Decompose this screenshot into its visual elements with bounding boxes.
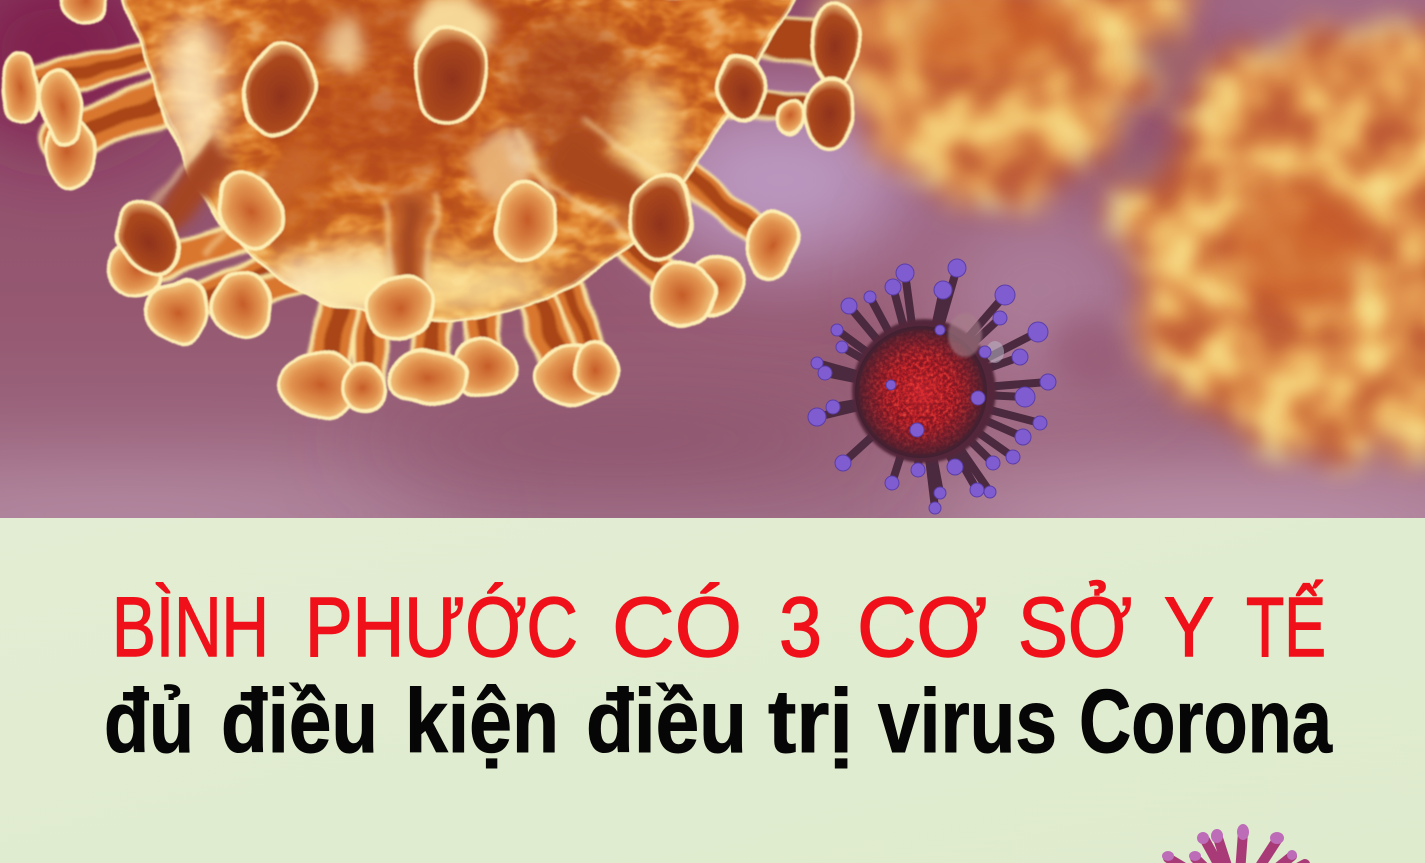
rear spikes	[30, 25, 830, 385]
blurred virus core, right	[900, 0, 1368, 312]
title line 1: BÌNH	[112, 580, 269, 674]
title line 2: Corona	[1079, 672, 1333, 772]
blurred virus, top centre	[840, 0, 1191, 206]
title line 2: điều	[221, 672, 378, 772]
small magenta virus, bottom right	[1162, 824, 1305, 863]
title line 1	[112, 580, 1326, 674]
spikes	[817, 268, 1048, 508]
title line 1: PHƯỚC	[305, 580, 578, 674]
photo panel: virus banner	[0, 0, 1425, 555]
banner background	[0, 0, 1425, 555]
small purple virus	[808, 259, 1056, 514]
title line 1: TẾ	[1246, 580, 1326, 674]
blurred virus, right	[1120, 33, 1425, 461]
title line 2	[104, 672, 1333, 772]
body	[850, 313, 1004, 470]
front spike ridges	[150, 120, 665, 285]
spike heads	[808, 259, 1056, 514]
front spike heads	[105, 29, 767, 340]
virus body	[100, 0, 800, 330]
title line 2: điều	[586, 672, 747, 772]
title line 1: CÓ	[612, 580, 742, 674]
rear spike heads	[3, 0, 859, 417]
front spikes	[153, 130, 652, 289]
title line 2: virus	[878, 672, 1057, 772]
title line 2: kiện	[405, 672, 559, 772]
title line 1: CƠ	[857, 580, 987, 674]
title line 2: đủ	[104, 672, 194, 772]
title line 1: Y	[1164, 580, 1214, 674]
title line 1: SỞ	[1018, 580, 1132, 674]
title line 1: 3	[779, 580, 822, 674]
main virus: orange coronavirus	[3, 0, 859, 417]
title line 2: trị	[768, 672, 853, 772]
background panel: pale green lower page	[0, 518, 1425, 863]
